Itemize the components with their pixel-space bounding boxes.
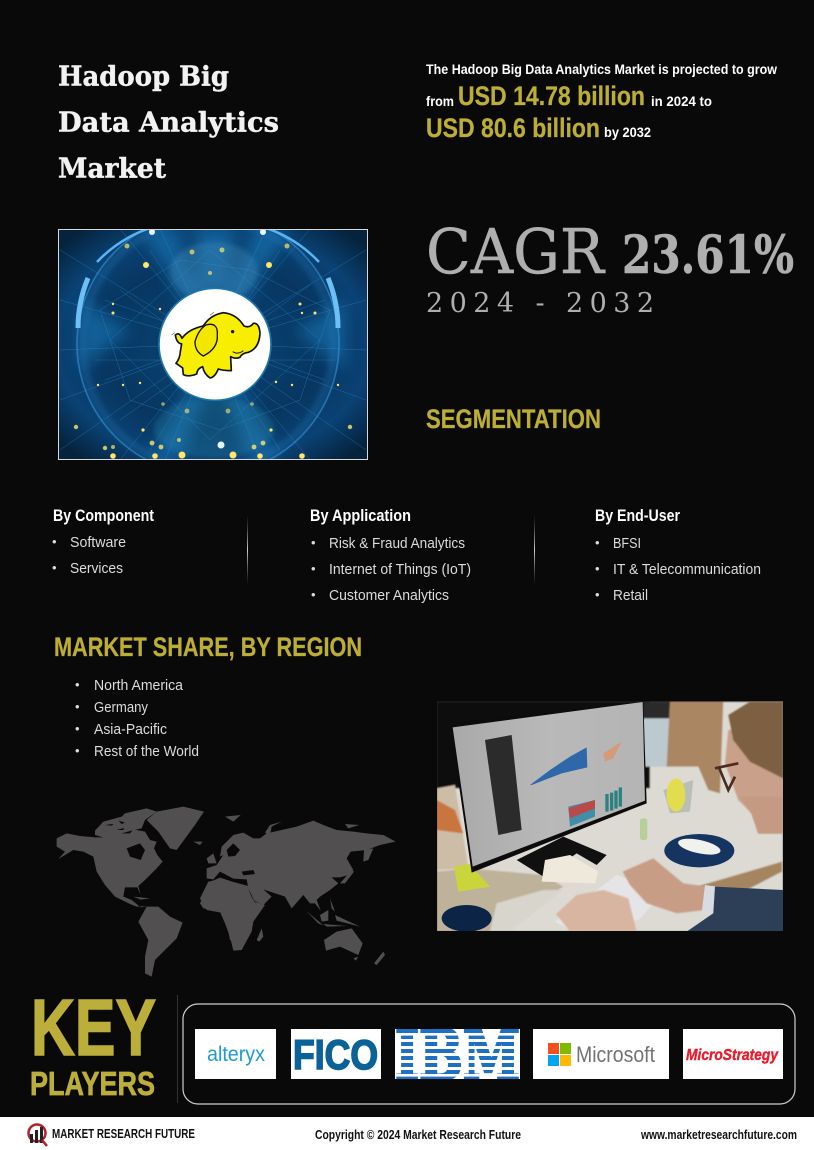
- hadoop logo circle: [159, 288, 271, 400]
- region list: North America: [94, 677, 184, 694]
- segment column: by end-user: •: [595, 587, 600, 602]
- footer: [0, 1117, 814, 1150]
- market projection text: The Hadoop Big Data Analytics Market is projected to grow: [426, 61, 777, 77]
- region list: •: [75, 699, 80, 714]
- segment column: by end-user: •: [595, 561, 600, 576]
- sub: monitor stand: [517, 837, 607, 877]
- logo: IBM: IBM: [395, 1016, 520, 1096]
- market projection text: USD 80.6 billion: [426, 113, 600, 143]
- segment column: by component: Services: [70, 560, 123, 577]
- icon: yellow elephant: [172, 312, 260, 378]
- segment column: by component: •: [52, 534, 57, 549]
- footer: MARKET RESEARCH FUTURE: [52, 1126, 195, 1141]
- CAGR: 2024 - 2032: [426, 288, 654, 319]
- region list: [75, 677, 199, 760]
- title: [58, 60, 279, 184]
- segment column: by application: •: [311, 587, 316, 602]
- sub: desk objects: [542, 855, 598, 883]
- market projection text: [426, 61, 777, 143]
- region list: •: [75, 677, 80, 692]
- logo: alteryx: alteryx: [207, 1043, 265, 1066]
- sub: sleeve: [702, 885, 717, 913]
- photo: analyst at computer: [437, 702, 783, 932]
- key players panel: [183, 1004, 795, 1104]
- segment column: by application: [310, 506, 471, 604]
- key players label: KEY: [31, 983, 156, 1072]
- CAGR: [426, 215, 794, 319]
- icon: market research future logo: [28, 1124, 47, 1146]
- sub: mug: [442, 905, 492, 932]
- segment column: by application: Customer Analytics: [329, 587, 449, 604]
- segment column: by component: Software: [70, 534, 126, 551]
- logo: Microsoft: [533, 1029, 669, 1079]
- segmentation heading: SEGMENTATION: [426, 404, 601, 434]
- sub: dotted dome: [170, 242, 258, 302]
- CAGR: CAGR: [426, 215, 606, 288]
- logo: Microsoft: Microsoft: [576, 1042, 655, 1067]
- title: Market: [58, 152, 166, 184]
- market share heading: MARKET SHARE, BY REGION: [54, 632, 362, 662]
- key players label: PLAYERS: [30, 1065, 155, 1102]
- segment column: by end-user: •: [595, 535, 600, 550]
- footer: Copyright © 2024 Market Research Future: [315, 1127, 521, 1142]
- sub: desk and background: [437, 702, 783, 932]
- segment column: by end-user: BFSI: [613, 535, 641, 552]
- segment column: by component: •: [52, 560, 57, 575]
- segment column: by application: •: [311, 535, 316, 550]
- segment column: by component: By Component: [53, 506, 154, 525]
- segment column: by application: Internet of Things (IoT): [329, 561, 471, 578]
- segment column: by application: Risk & Fraud Analytics: [329, 535, 465, 552]
- sub: sticky note: [454, 864, 490, 892]
- sub: light beams: [80, 229, 345, 460]
- hero image border: [58, 230, 368, 460]
- market projection text: from: [426, 93, 454, 109]
- sub: hands: [623, 858, 707, 913]
- title: Hadoop Big: [58, 60, 229, 92]
- sub: keyboard: [555, 875, 652, 928]
- logo: MicroStrategy: [683, 1029, 783, 1079]
- segment column: by application: •: [311, 561, 316, 576]
- segment column: by application: By Application: [310, 506, 411, 525]
- segment column: by end-user: Retail: [613, 587, 648, 604]
- segment column: by component: [52, 506, 154, 577]
- sub: network lines: [60, 229, 366, 460]
- market projection text: USD 14.78 billion: [458, 81, 645, 111]
- logo: alteryx: [195, 1029, 276, 1079]
- sub: monitor: [450, 702, 647, 873]
- region list: Rest of the World: [94, 743, 199, 760]
- region list: Germany: [94, 699, 148, 716]
- region list: •: [75, 743, 80, 758]
- market projection text: in 2024 to: [651, 93, 712, 109]
- market projection text: by 2032: [604, 124, 651, 140]
- region list: Asia-Pacific: [94, 721, 167, 738]
- key players label: [30, 983, 156, 1102]
- segment column: by end-user: By End-User: [595, 506, 680, 525]
- title: Data Analytics: [58, 106, 279, 138]
- segment column: by end-user: IT & Telecommunication: [613, 561, 761, 578]
- sub: sphere ring: [82, 218, 334, 470]
- hero image: data sphere: [59, 230, 367, 459]
- logo: IBM: [395, 1029, 520, 1079]
- logo: MicroStrategy: MicroStrategy: [686, 1047, 779, 1064]
- segment column: by end-user: [595, 506, 761, 604]
- sub: man's head: [725, 723, 783, 833]
- sub: glowing nodes: [74, 244, 352, 459]
- world map: [57, 807, 396, 977]
- logo: FICO: FICO: [293, 1031, 378, 1078]
- region list: •: [75, 721, 80, 736]
